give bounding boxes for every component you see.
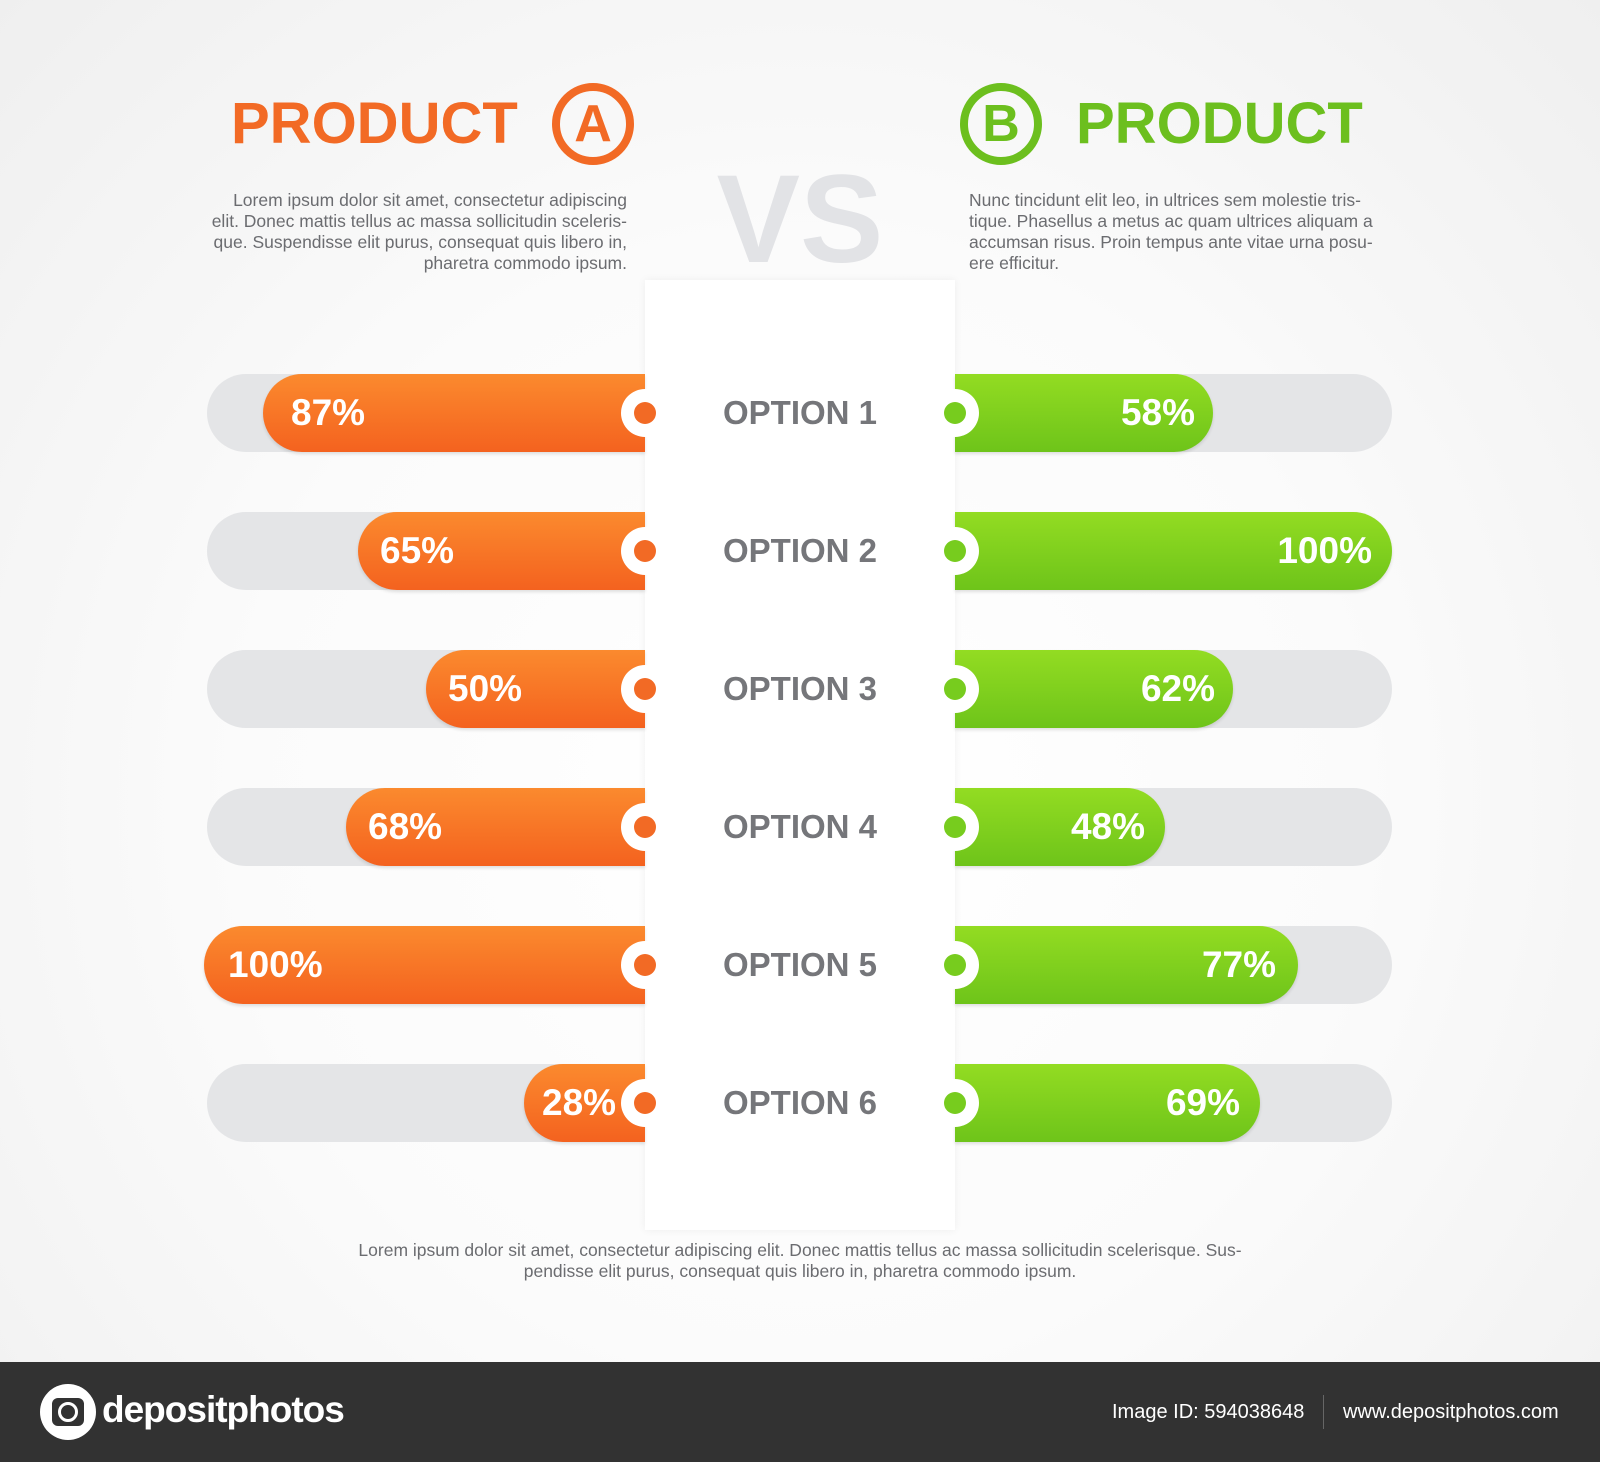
footer note: Lorem ipsum dolor sit amet, consectetur adipiscing elit. Donec mattis tellus ac massa sollicitudin scelerisque. Sus- bbox=[358, 1240, 1242, 1260]
text: product A description: Lorem ipsum dolor sit amet, consectetur adipiscing bbox=[233, 190, 627, 210]
row: option 3: 50% bbox=[448, 668, 522, 709]
text: product A description: pharetra commodo ipsum. bbox=[424, 253, 627, 273]
row: option 2: OPTION 2 bbox=[723, 532, 877, 569]
text: product B description: ere efficitur. bbox=[969, 253, 1059, 273]
icon: camera logo bbox=[40, 1384, 96, 1440]
row: option 1: 58% bbox=[1121, 392, 1195, 433]
row: option 2: 65% bbox=[380, 530, 454, 571]
footer note: pendisse elit purus, consequat quis libero in, pharetra commodo ipsum. bbox=[524, 1261, 1076, 1281]
row: option 4: 48% bbox=[1071, 806, 1145, 847]
row: option 6: OPTION 6 bbox=[723, 1084, 877, 1121]
url: www.depositphotos.com bbox=[1343, 1401, 1559, 1423]
row: option 2 bbox=[207, 512, 1393, 593]
row: option 6 bbox=[207, 1064, 1392, 1145]
row: option 5: 77% bbox=[1202, 944, 1276, 985]
row: option 2: 100% bbox=[1277, 530, 1372, 571]
row: option 5 bbox=[203, 926, 1392, 1007]
text: product B description: tique. Phasellus a metus ac quam ultrices aliquam a bbox=[969, 211, 1373, 231]
text: product A description: elit. Donec mattis tellus ac massa sollicitudin sceleris- bbox=[212, 211, 627, 231]
text: product B description bbox=[969, 190, 1373, 273]
icon: circle A bbox=[552, 83, 634, 165]
title: product A: PRODUCT bbox=[231, 91, 518, 156]
center panel bbox=[645, 280, 955, 1230]
row: option 5: 100% bbox=[228, 944, 323, 985]
row: option 4: OPTION 4 bbox=[723, 808, 877, 845]
row: option 1 bbox=[207, 374, 1392, 455]
text: product B description: accumsan risus. Proin tempus ante vitae urna posu- bbox=[969, 232, 1373, 252]
row: option 1: OPTION 1 bbox=[723, 394, 877, 431]
image id: Image ID: 594038648 bbox=[1112, 1401, 1304, 1423]
title: product B bbox=[960, 83, 1363, 165]
VS heading: VS bbox=[717, 150, 883, 289]
footer note bbox=[358, 1240, 1242, 1281]
row: option 3 bbox=[207, 650, 1392, 731]
icon: circle B bbox=[960, 83, 1042, 165]
logo text: depositphotos bbox=[102, 1389, 344, 1430]
row: option 3: 62% bbox=[1141, 668, 1215, 709]
row: option 1: 87% bbox=[291, 392, 365, 433]
row: option 6: 28% bbox=[542, 1082, 616, 1123]
row: option 6: 69% bbox=[1166, 1082, 1240, 1123]
row: option 4: 68% bbox=[368, 806, 442, 847]
title: product B: PRODUCT bbox=[1076, 91, 1363, 156]
text: product A description bbox=[212, 190, 627, 273]
text: product B description: Nunc tincidunt elit leo, in ultrices sem molestie tris- bbox=[969, 190, 1361, 210]
watermark footer bar bbox=[0, 1362, 1600, 1462]
icon: circle A: A bbox=[574, 95, 612, 153]
row: option 3: OPTION 3 bbox=[723, 670, 877, 707]
title: product A bbox=[231, 83, 634, 165]
row: option 5: OPTION 5 bbox=[723, 946, 877, 983]
icon: circle B: B bbox=[982, 95, 1020, 153]
text: product A description: que. Suspendisse elit purus, consequat quis libero in, bbox=[214, 232, 627, 252]
row: option 4 bbox=[207, 788, 1392, 869]
